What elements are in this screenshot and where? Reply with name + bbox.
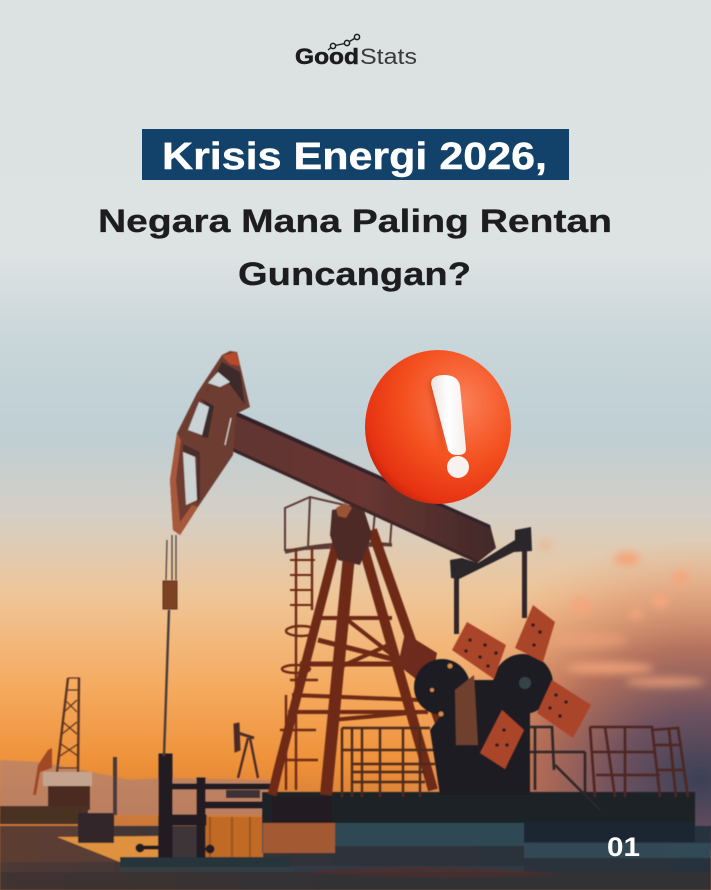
- gears and gearbox: [414, 654, 553, 795]
- right side fence: [528, 727, 688, 810]
- page number: 01: [607, 832, 640, 862]
- platform base: [262, 792, 695, 853]
- logo: GoodStats: [295, 34, 417, 69]
- subtitle: [98, 203, 612, 292]
- title banner: [142, 129, 569, 180]
- sunset clouds: [539, 540, 705, 687]
- rear counterweight: [398, 633, 437, 690]
- alert badge: [365, 350, 511, 504]
- gearbox column: [455, 675, 478, 745]
- badge: red sphere: [365, 350, 511, 504]
- beam end bracket: [450, 527, 532, 579]
- exclamation mark: [429, 375, 469, 478]
- subtitle: Guncangan?: [238, 256, 471, 292]
- distant small pump: [226, 723, 260, 798]
- wellhead: [136, 754, 270, 857]
- ground: [0, 826, 711, 890]
- polished rod and cable: [163, 535, 177, 756]
- orange water and tank: [57, 757, 290, 867]
- distant derrick: [57, 678, 80, 772]
- logo: GoodStats: Stats: [360, 44, 417, 69]
- subtitle: Negara Mana Paling Rentan: [98, 203, 612, 239]
- horsehead: [170, 351, 250, 535]
- distant hills: [0, 760, 270, 815]
- counterweight arms: [452, 605, 591, 769]
- logo: GoodStats: Good: [295, 44, 359, 69]
- distant building: [0, 748, 92, 824]
- walking beam: [223, 412, 496, 563]
- title banner: Krisis Energi 2026,: [162, 136, 547, 178]
- pitman rods: [454, 548, 527, 634]
- A-frame tower: [272, 525, 453, 795]
- scene: oil field: [0, 351, 711, 890]
- lower railings: [342, 728, 440, 797]
- safety cage on samson post: [285, 497, 392, 552]
- bearing and top of tower: [330, 503, 372, 565]
